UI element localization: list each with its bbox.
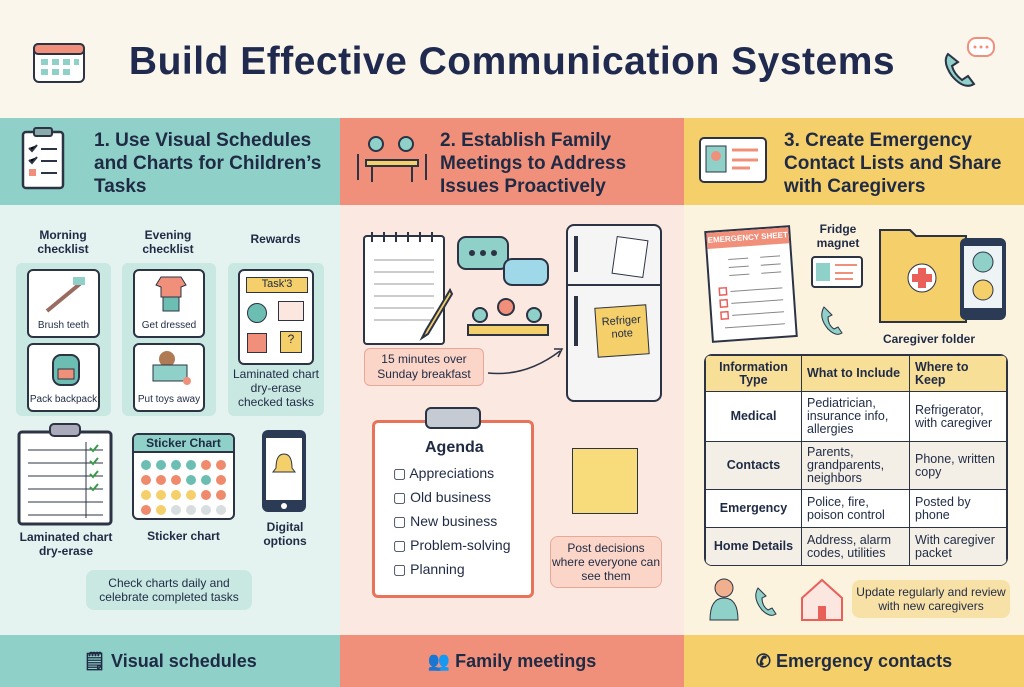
sticker chart bbox=[132, 433, 235, 543]
panel: visual schedules: Get dressed bbox=[142, 320, 196, 331]
icon: meeting bbox=[357, 136, 427, 182]
footer: emergency contacts: ✆ Emergency contacts bbox=[756, 651, 952, 671]
panel: visual schedules: Task'3 bbox=[262, 278, 292, 290]
agenda clipboard: ▢ Problem-solving bbox=[393, 537, 510, 553]
table: info types: What to Include bbox=[807, 366, 900, 380]
callout: 15 minutes: 15 minutes over Sunday breakfast bbox=[377, 352, 471, 381]
panel: visual schedules: ? bbox=[288, 332, 294, 346]
callout: 15 minutes bbox=[364, 348, 484, 386]
icon: id card bbox=[699, 137, 767, 183]
digital options: options bbox=[263, 534, 307, 548]
heading 2: 2. Establish Family Meetings to Address Issues Proactively bbox=[440, 130, 626, 197]
heading 2 bbox=[340, 118, 684, 205]
panel: visual schedules: Pack backpack bbox=[30, 394, 97, 405]
heading 1 bbox=[0, 118, 340, 205]
sticky note bbox=[572, 448, 638, 514]
callout: update regularly: Update regularly and review with new caregivers bbox=[856, 585, 1006, 613]
table: info types: Parents, grandparents, neighbors bbox=[807, 445, 884, 485]
icon: clipboard bbox=[22, 127, 64, 190]
fridge magnet bbox=[817, 222, 860, 250]
table: info types: Where to Keep bbox=[915, 360, 968, 386]
callout: check charts: Check charts daily and celebrate completed tasks bbox=[99, 576, 239, 604]
heading 1: 1. Use Visual Schedules and Charts for Children’s Tasks bbox=[94, 130, 321, 197]
table: info types: Emergency bbox=[720, 501, 787, 515]
footer: family meetings: 👥 Family meetings bbox=[428, 651, 596, 671]
morning checklist: checklist bbox=[37, 242, 89, 256]
table: info types: Medical bbox=[731, 409, 776, 423]
emergency sheet: EMERGENCY SHEET bbox=[707, 230, 788, 245]
panel: visual schedules bbox=[0, 118, 340, 687]
arrow bbox=[488, 348, 564, 374]
icons: doctor phone house bbox=[710, 578, 843, 621]
footer: visual schedules bbox=[0, 635, 340, 687]
panel: visual schedules: Laminated chart dry-erase checked tasks bbox=[233, 367, 319, 409]
laminated chart: Laminated chart dry-erase bbox=[20, 530, 112, 558]
agenda clipboard: Agenda bbox=[425, 439, 484, 456]
digital options bbox=[262, 430, 307, 548]
icon: phone chat bbox=[944, 37, 995, 87]
evening checklist: Evening bbox=[145, 228, 191, 242]
table: info types: Contacts bbox=[727, 458, 780, 472]
heading 3: 3. Create Emergency Contact Lists and Share with Caregivers bbox=[784, 130, 1002, 197]
callout: check charts bbox=[86, 570, 252, 610]
panel: visual schedules: Put toys away bbox=[138, 394, 200, 405]
agenda clipboard: ▢ Old business bbox=[393, 489, 491, 505]
table: info types: Police, fire, poison control bbox=[807, 494, 885, 522]
footer: family meetings bbox=[340, 635, 684, 687]
laminated chart bbox=[18, 423, 112, 558]
evening checklist: checklist bbox=[142, 242, 194, 256]
agenda clipboard bbox=[372, 420, 534, 598]
table: info types bbox=[704, 354, 1008, 566]
footer: visual schedules: 🗒 Visual schedules bbox=[83, 651, 257, 671]
morning checklist: Morning bbox=[39, 228, 87, 242]
table: info types: Posted by phone bbox=[915, 494, 971, 522]
sticker chart: Sticker Chart bbox=[146, 436, 221, 450]
callout: update regularly bbox=[852, 580, 1010, 618]
panel: family meetings bbox=[340, 118, 684, 687]
digital options: Digital bbox=[267, 520, 303, 534]
table: info types: Home Details bbox=[714, 539, 793, 553]
emergency sheet bbox=[704, 225, 798, 343]
table: info types: Address, alarm codes, utilities bbox=[807, 532, 891, 560]
footer: emergency contacts bbox=[684, 635, 1024, 687]
panel: emergency contacts: Caregiver folder bbox=[883, 332, 975, 346]
rewards: Rewards bbox=[250, 232, 301, 246]
table: info types: Pediatrician, insurance info, allergies bbox=[807, 396, 888, 436]
notebook bbox=[363, 232, 454, 345]
agenda clipboard: ▢ New business bbox=[393, 513, 497, 529]
table: info types: Information Type bbox=[719, 360, 788, 386]
fridge magnet: magnet bbox=[817, 236, 859, 250]
title: Build Effective Communication Systems bbox=[129, 40, 895, 83]
fridge magnet: Fridge bbox=[820, 222, 856, 236]
fridge bbox=[566, 224, 662, 402]
table: info types: Phone, written copy bbox=[915, 452, 995, 478]
callout: post decisions: Post decisions where everyone can see them bbox=[552, 541, 660, 583]
panel: emergency contacts bbox=[684, 118, 1024, 687]
table: info types: Refrigerator, with caregiver bbox=[915, 402, 992, 430]
fridge: Refriger note bbox=[601, 314, 641, 341]
heading 3 bbox=[684, 118, 1024, 205]
morning checklist bbox=[37, 228, 89, 256]
icon: chat bubbles & people bbox=[457, 236, 549, 336]
agenda clipboard: ▢ Planning bbox=[393, 561, 465, 577]
icon: calendar bbox=[33, 43, 85, 83]
table: info types: With caregiver packet bbox=[915, 532, 995, 560]
panel: visual schedules: Brush teeth bbox=[38, 320, 89, 331]
caregiver folder bbox=[879, 229, 1006, 323]
evening checklist bbox=[142, 228, 194, 256]
sticker chart: Sticker chart bbox=[147, 529, 220, 543]
agenda clipboard: ▢ Appreciations bbox=[393, 465, 494, 481]
